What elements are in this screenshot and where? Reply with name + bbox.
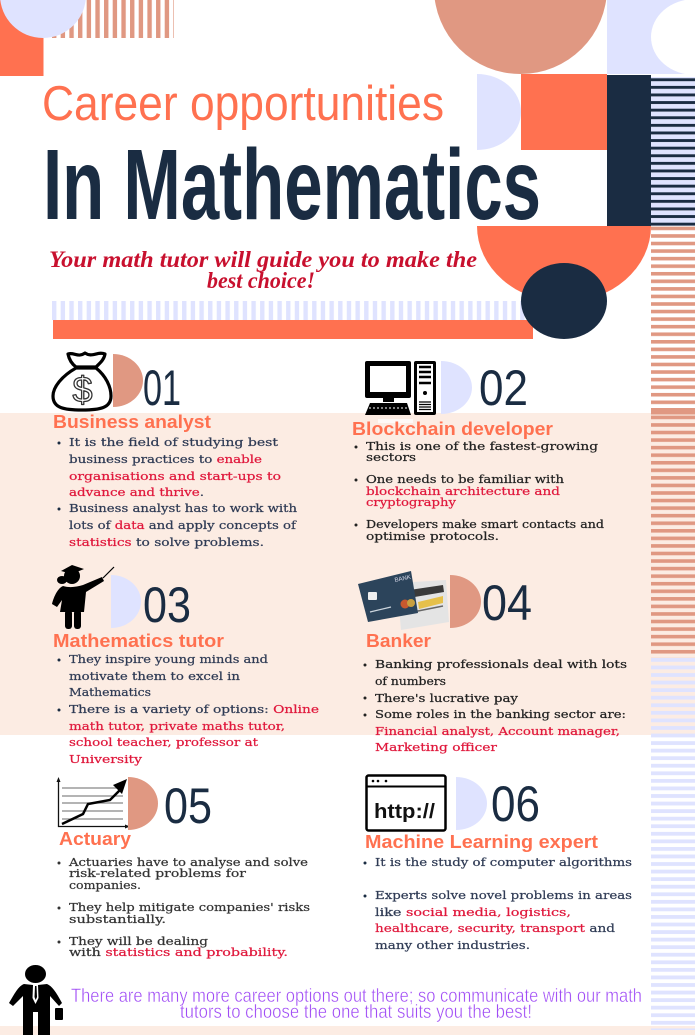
- panel: business analyst: [53, 353, 297, 549]
- heading: Machine Learning expert: [365, 832, 598, 852]
- bullet list: It is the study of computer algorithms: [375, 856, 632, 869]
- bullet list: Financial analyst, Account manager,: [375, 725, 620, 738]
- bullet list: motivate them to excel in: [69, 670, 240, 683]
- bullet list: There's lucrative pay: [375, 692, 519, 705]
- icon: browser window: [366, 776, 446, 830]
- bullet list: substantially.: [69, 913, 166, 926]
- heading: Blockchain developer: [352, 419, 553, 439]
- decorative header shapes: [0, 0, 695, 339]
- panel: mathematics tutor: [52, 565, 319, 766]
- bullet list: [58, 653, 319, 766]
- panel: peach footer band: [0, 1026, 695, 1035]
- bullet list: advance and thrive .: [69, 486, 204, 499]
- bullet list: like social media, logistics,: [375, 906, 571, 919]
- icon: bank cards: BANK: [394, 575, 411, 584]
- panel: peach background band: [0, 413, 695, 735]
- bullet list: optimise protocols.: [366, 530, 499, 543]
- bullet list: [58, 436, 297, 549]
- panel: blockchain developer: [352, 360, 604, 543]
- icon: money bag: [53, 353, 111, 410]
- subtitle: [49, 247, 477, 293]
- bullet list: lots of data and apply concepts of: [69, 519, 297, 532]
- icon: browser window: http://: [374, 801, 435, 823]
- bullet list: cryptography: [366, 496, 457, 509]
- number badge 02: 02: [479, 360, 528, 416]
- bullet list: Some roles in the banking sector are:: [375, 708, 626, 721]
- number badge 05: [128, 777, 212, 834]
- number badge 03: [111, 575, 191, 633]
- bullet list: many other industries.: [375, 939, 530, 952]
- bullet list: of numbers: [375, 675, 446, 688]
- bullet list: Actuaries have to analyse and solve: [68, 856, 308, 869]
- heading: Banker: [366, 631, 431, 651]
- icon: desktop computer: [365, 361, 436, 415]
- number badge 05: 05: [164, 778, 212, 834]
- panel: machine learning expert: [364, 776, 632, 952]
- icon: teacher with pointer: [52, 565, 114, 629]
- bullet list: math tutor, private maths tutor,: [69, 720, 285, 733]
- footer message: [71, 986, 642, 1023]
- heading: Mathematics tutor: [53, 631, 224, 651]
- icon: rising chart: [56, 777, 130, 828]
- bullet list: [58, 856, 310, 959]
- bullet list: organisations and start-ups to: [69, 470, 281, 483]
- bullet list: University: [69, 753, 143, 766]
- number badge 04: [450, 575, 532, 631]
- bullet list: They help mitigate companies' risks: [69, 901, 310, 914]
- bullet list: Banking professionals deal with lots: [375, 658, 627, 671]
- bullet list: Mathematics: [69, 686, 151, 699]
- bullet list: Business analyst has to work with: [69, 502, 297, 515]
- bullet list: They will be dealing: [69, 935, 208, 948]
- number badge 06: 06: [491, 776, 540, 832]
- bullet list: [354, 440, 604, 543]
- footer message: tutors to choose the one that suits you the best!: [180, 1002, 532, 1023]
- bullet list: It is the field of studying best: [69, 436, 279, 449]
- bullet list: Developers make smart contacts and: [366, 518, 604, 531]
- number badge 06: [456, 776, 540, 832]
- bullet list: school teacher, professor at: [69, 736, 259, 749]
- icon: money bag: $: [72, 369, 93, 410]
- heading: Actuary: [59, 829, 131, 849]
- number badge 01: [113, 354, 181, 416]
- number badge 02: [441, 360, 528, 416]
- icon: businessman with briefcase: [9, 965, 63, 1035]
- right stripes: [651, 227, 695, 1030]
- title line 1: Career opportunities: [42, 77, 444, 131]
- bullet list: They inspire young minds and: [69, 653, 268, 666]
- number badge 03: 03: [143, 577, 191, 633]
- number badge 04: 04: [482, 575, 532, 631]
- number badge 01: 01: [143, 360, 181, 416]
- bullet list: [364, 856, 632, 952]
- bullet list: business practices to enable: [69, 453, 262, 466]
- bullet list: sectors: [366, 451, 416, 464]
- bullet list: Experts solve novel problems in areas: [375, 889, 632, 902]
- bullet list: This is one of the fastest-growing: [366, 440, 598, 453]
- bullet list: with statistics and probability.: [69, 946, 288, 959]
- panel: banker: [358, 571, 627, 754]
- panel: actuary: [56, 777, 310, 959]
- bullet list: [364, 658, 627, 754]
- bullet list: Marketing officer: [375, 741, 498, 754]
- bullet list: risk-related problems for: [69, 867, 247, 880]
- bullet list: One needs to be familiar with: [366, 473, 564, 486]
- icon: bank cards: [358, 571, 449, 630]
- bullet list: blockchain architecture and: [366, 485, 560, 498]
- bullet list: healthcare, security, transport and: [375, 922, 615, 935]
- bullet list: There is a variety of options: Online: [69, 703, 319, 716]
- heading: Business analyst: [53, 412, 211, 432]
- subtitle: Your math tutor will guide you to make the: [49, 247, 477, 272]
- bullet list: companies.: [69, 879, 141, 892]
- subtitle: best choice!: [207, 268, 315, 293]
- bullet list: statistics to solve problems.: [69, 536, 264, 549]
